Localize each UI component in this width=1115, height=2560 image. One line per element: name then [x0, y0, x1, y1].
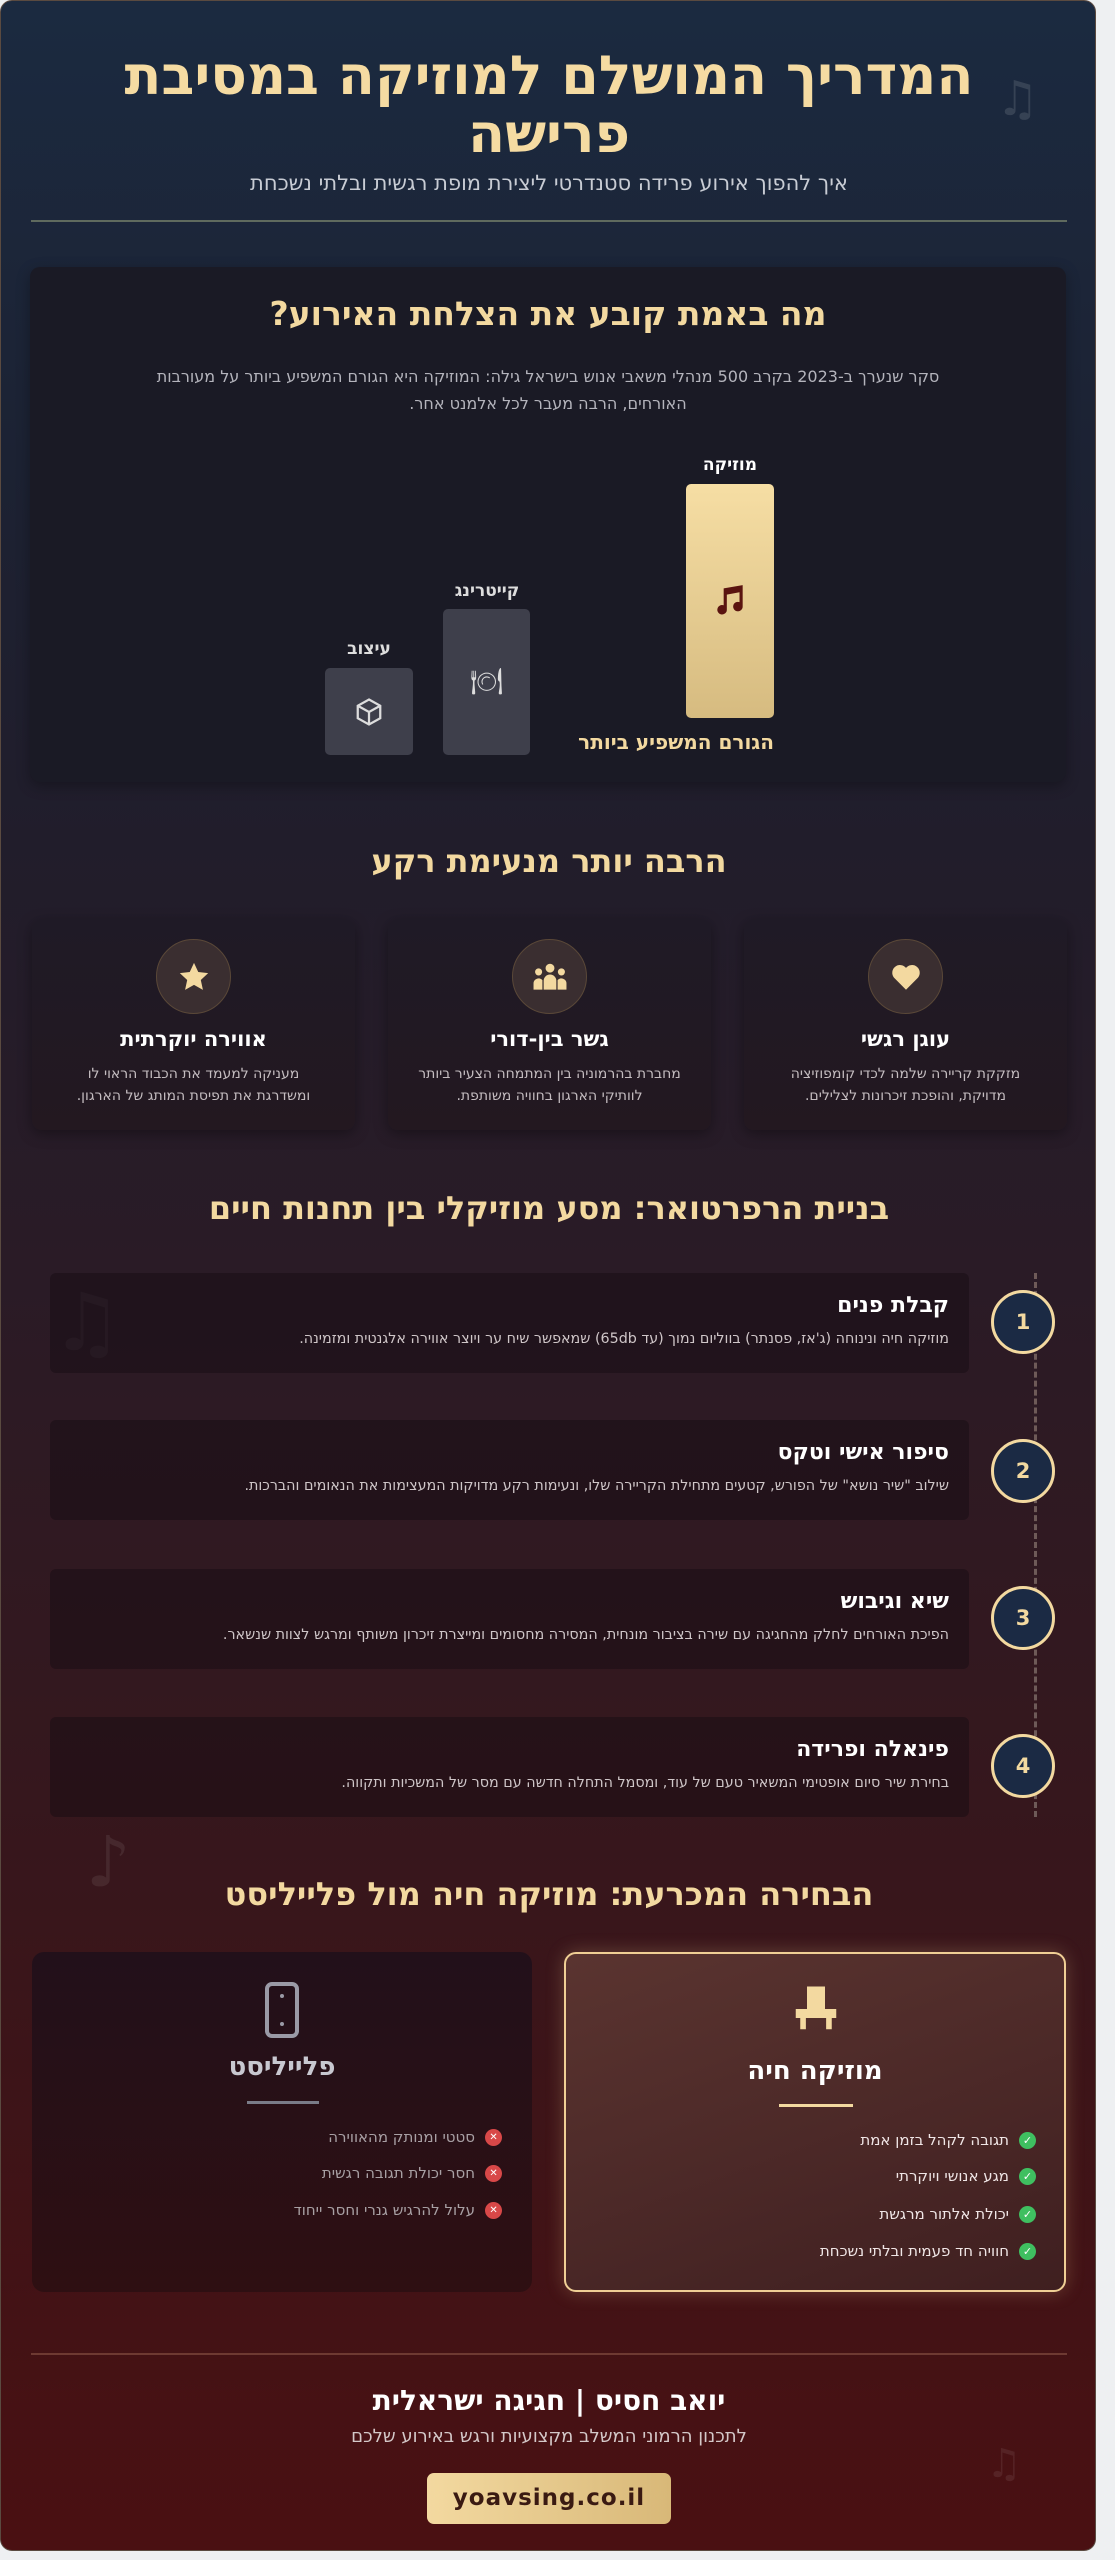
section heading: live vs playlist: הבחירה המכרעת: מוזיקה חיה מול פלייליסט — [225, 1875, 873, 1913]
panel: live music — [564, 1952, 1066, 2292]
timeline step 3 — [50, 1569, 969, 1669]
timeline step 4: בחירת שיר סיום אופטימי המשאיר טעם של עוד, ומסמל התחלה חדשה עם מסר של המשכיות ותקווה. — [341, 1775, 949, 1791]
card: emotional anchor — [744, 919, 1067, 1130]
card: intergenerational bridge — [388, 919, 711, 1130]
decorative note: ♫ — [51, 1276, 123, 1369]
panel: live music: ✓ — [1023, 2244, 1032, 2258]
footer title: יואב חסיס | חגיגה ישראלית — [373, 2384, 725, 2417]
panel: playlist: ✕ — [489, 2132, 498, 2142]
card: emotional anchor: עוגן רגשי — [861, 1027, 950, 1051]
panel: playlist: סטטי ומנותק מהאווירה — [328, 2128, 475, 2146]
caption: הגורם המשפיע ביותר — [578, 730, 774, 754]
panel: live music: מגע אנושי ויוקרתי — [896, 2167, 1009, 2185]
panel: live music: ✓ — [1023, 2134, 1032, 2146]
icon: phone — [265, 1982, 299, 2038]
timeline step 3: שיא וגיבוש — [841, 1589, 949, 1614]
timeline step 1: מוזיקה חיה ונינוחה (ג'אז, פסנתר) בווליום נמוך (עד 65db) שמאפשר שיח ער ויוצר אווירה אלגנטית ומזמינה. — [299, 1331, 949, 1347]
timeline step 4 — [50, 1717, 969, 1817]
step number 1 — [991, 1290, 1055, 1354]
panel: playlist: ✕ — [489, 2168, 498, 2178]
paragraph: סקר שנערך ב-2023 בקרב 500 מנהלי משאבי אנוש בישראל גילה: המוזיקה היא הגורם המשפיע ביותר על מעורבות האורחים, הרבה מעבר לכל אלמנט אחר. — [157, 367, 939, 413]
step number 4 — [991, 1734, 1055, 1798]
timeline step 1: קבלת פנים — [837, 1293, 949, 1318]
panel: playlist: פלייליסט — [229, 2052, 335, 2082]
icon: people — [512, 939, 587, 1014]
bar: design — [325, 668, 413, 755]
card: intergenerational bridge: מחברת בהרמוניה בין המתמחה הצעיר ביותר לוותיקי הארגון בחוויה משותפת. — [418, 1066, 681, 1104]
decorative note bottom: ♫ — [986, 2441, 1022, 2487]
panel: live music: ✓ — [1023, 2208, 1032, 2220]
button: website: yoavsing.co.il — [453, 2485, 645, 2511]
title: המדריך המושלם למוזיקה במסיבת פרישה — [125, 44, 973, 165]
bar: catering — [443, 609, 530, 755]
timeline step 2: סיפור אישי וטקס — [778, 1440, 949, 1465]
section heading: more than background: הרבה יותר מנעימת רקע — [371, 842, 727, 880]
panel: playlist — [32, 1952, 532, 2292]
card: intergenerational bridge: גשר בין-דורי — [490, 1027, 609, 1051]
card: emotional anchor: מזקקת קריירה שלמה לכדי קומפוזיציה מדויקת, והופכת זיכרונות לצלילים. — [791, 1066, 1020, 1104]
panel: survey chart — [30, 267, 1066, 782]
decorative note: ♪ — [86, 1821, 131, 1903]
step number 1: 1 — [1016, 1310, 1030, 1334]
bar chart — [325, 455, 774, 755]
panel: playlist: ✕ — [489, 2204, 498, 2216]
panel: playlist: עלול להרגיש גנרי וחסר ייחוד — [294, 2201, 475, 2219]
label: catering: קייטרינג — [455, 581, 519, 601]
step number 2: 2 — [1016, 1459, 1030, 1483]
icon: heart — [868, 939, 943, 1014]
icon: star — [156, 939, 231, 1014]
step number 4: 4 — [1016, 1754, 1030, 1778]
card: prestigious atmosphere — [32, 919, 355, 1130]
label: design: עיצוב — [347, 639, 391, 659]
decorative note top: ♫ — [996, 71, 1039, 127]
bar: music — [686, 484, 774, 718]
section heading: repertoire: בניית הרפרטואר: מסע מוזיקלי בין תחנות חיים — [209, 1189, 889, 1227]
panel: live music: תגובה לקהל בזמן אמת — [860, 2131, 1009, 2149]
label: music: מוזיקה — [703, 455, 757, 475]
step number 3 — [991, 1586, 1055, 1650]
subtitle: איך להפוך אירוע פרידה סטנדרטי ליצירת מופת רגשית ובלתי נשכחת — [250, 171, 848, 195]
panel: live music: מוזיקה חיה — [747, 2056, 883, 2086]
panel: live music: יכולת אלתור מרגשת — [879, 2205, 1009, 2223]
step number 2 — [991, 1439, 1055, 1503]
icon: piano — [796, 1986, 836, 2030]
panel: live music: ✓ — [1023, 2170, 1032, 2182]
timeline step 3: הפיכת האורחים לחלק מהחגיגה עם שירה בציבור מונחית, המסירה מחסומים ומייצרת זיכרון משותף ומרגש לצוות שנשאר. — [223, 1627, 949, 1643]
step number 3: 3 — [1016, 1606, 1030, 1630]
card: prestigious atmosphere: מעניקה למעמד את הכבוד הראוי לו ומשדרגת את תפיסת המותג של הארגון. — [77, 1066, 310, 1104]
bar: catering: 🍽 — [470, 667, 503, 697]
card: prestigious atmosphere: אווירה יוקרתית — [120, 1027, 267, 1051]
panel: live music: חוויה חד פעמית ובלתי נשכחת — [820, 2242, 1009, 2260]
timeline step 2 — [50, 1420, 969, 1520]
footer subtitle: לתכנון הרמוני המשלב מקצועיות ורגש באירוע שלכם — [351, 2426, 747, 2447]
timeline step 1 — [50, 1273, 969, 1373]
button: website — [427, 2473, 671, 2524]
timeline step 4: פינאלה ופרידה — [796, 1737, 949, 1762]
panel heading: מה באמת קובע את הצלחת האירוע? — [270, 294, 826, 333]
timeline step 2: שילוב "שיר נושא" של הפורש, קטעים מתחילת הקריירה שלו, ונעימות רקע מדויקות המעצימות את הנאומים והברכות. — [244, 1478, 949, 1494]
panel: playlist: חסר יכולת תגובה רגשית — [322, 2164, 475, 2182]
